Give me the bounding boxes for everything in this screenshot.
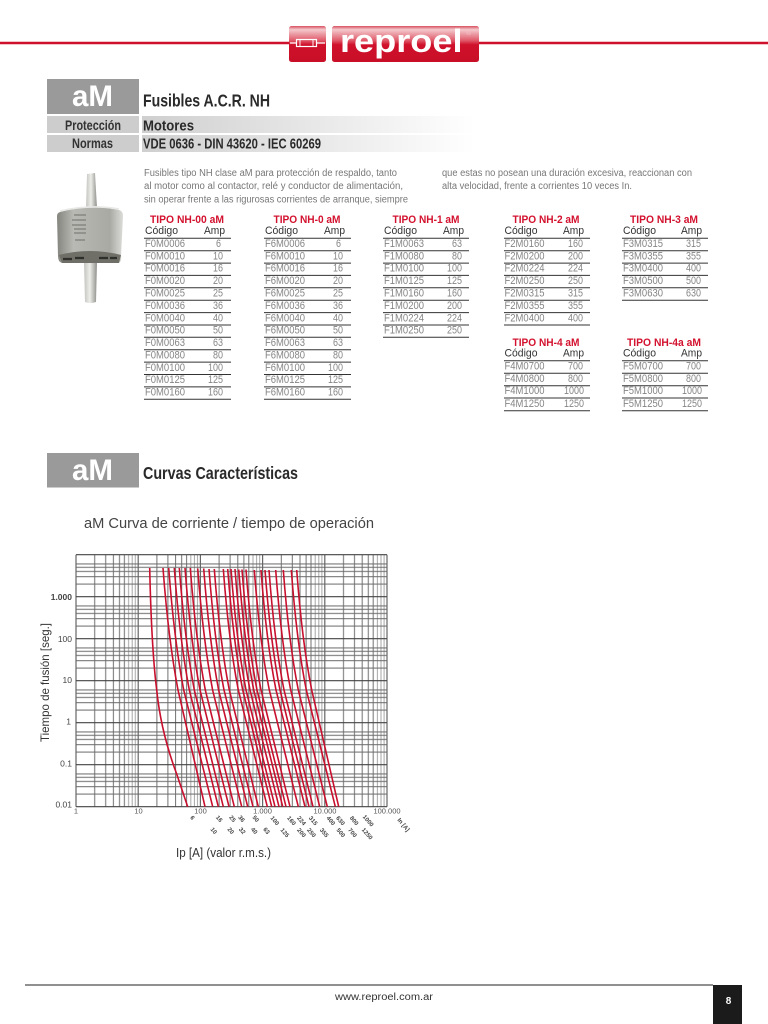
description text [144, 168, 692, 206]
heading: Curvas Características: Curvas Características [143, 463, 298, 483]
table: TIPO NH-0 aM: F6M0063 [265, 337, 305, 349]
section badge: aM: aM [72, 80, 113, 113]
table: TIPO NH-4a aM [622, 337, 708, 411]
y axis labels: 1 [66, 716, 71, 726]
rated current labels: 250 [305, 828, 317, 840]
table: TIPO NH-1 aM: F1M0200 [384, 300, 424, 312]
header red rule [0, 42, 768, 44]
table: TIPO NH-0 aM: 16 [333, 263, 343, 275]
table: TIPO NH-0 aM: F6M0010 [265, 250, 305, 262]
table: TIPO NH-2 aM [504, 214, 590, 325]
table: TIPO NH-00 aM: 63 [213, 337, 223, 349]
table: TIPO NH-00 aM: F0M0050 [145, 325, 185, 337]
table: TIPO NH-4 aM: 1000 [564, 385, 584, 397]
table: TIPO NH-00 aM: 160 [208, 386, 223, 398]
table: TIPO NH-00 aM: 40 [213, 312, 223, 324]
table: TIPO NH-0 aM: F6M0080 [265, 349, 305, 361]
description text: al motor como al contactor, relé y conductor de alimentación, [144, 181, 403, 192]
table: TIPO NH-1 aM: F1M0080 [384, 250, 424, 262]
table: TIPO NH-4 aM [504, 337, 590, 411]
table: TIPO NH-0 aM: 160 [328, 386, 343, 398]
rated current labels: 224 [295, 816, 307, 828]
rated current labels [188, 814, 410, 842]
table: TIPO NH-2 aM: F2M0400 [504, 312, 544, 324]
table: TIPO NH-3 aM: Código [623, 225, 656, 237]
y axis labels: 100 [58, 634, 72, 644]
table: TIPO NH-00 aM: F0M0010 [145, 250, 185, 262]
logo: reproel: ® [466, 29, 472, 37]
table: TIPO NH-3 aM: 500 [686, 275, 701, 287]
description text: sin operar frente a las rigurosas corrientes de arranque, siempre [144, 194, 408, 206]
table: TIPO NH-0 aM: 25 [333, 288, 343, 300]
table: TIPO NH-0 aM: F6M0160 [265, 386, 305, 398]
table: TIPO NH-1 aM: F1M0125 [384, 275, 424, 287]
rated current labels: In [A] [396, 818, 410, 833]
table: TIPO NH-1 aM: 250 [447, 325, 462, 337]
table: TIPO NH-2 aM: 200 [568, 250, 583, 262]
icon: fuse [289, 26, 326, 62]
table: TIPO NH-00 aM: 100 [208, 362, 223, 374]
fuse curves [150, 568, 339, 807]
table: TIPO NH-00 aM: 6 [216, 238, 221, 250]
table: TIPO NH-2 aM: 250 [568, 275, 583, 287]
table: TIPO NH-4a aM: 700 [686, 360, 701, 372]
table: TIPO NH-2 aM: F2M0250 [504, 275, 544, 287]
x axis labels: 100 [194, 806, 207, 816]
row: Normas: Normas [72, 135, 113, 151]
table: TIPO NH-3 aM: F3M0315 [623, 238, 663, 250]
y axis labels: 10 [63, 675, 72, 685]
table: TIPO NH-0 aM: 100 [328, 362, 343, 374]
rated current labels: 400 [325, 816, 336, 828]
table: TIPO NH-0 aM: 125 [328, 374, 343, 386]
table: TIPO NH-3 aM: F3M0355 [623, 250, 663, 262]
x axis labels: 10.000 [314, 806, 336, 816]
table: TIPO NH-1 aM: F1M0100 [384, 263, 424, 275]
table: TIPO NH-0 aM: F6M0006 [265, 238, 305, 250]
table: TIPO NH-0 aM: 6 [336, 238, 341, 250]
rated current labels: 630 [334, 816, 346, 828]
table: TIPO NH-00 aM [144, 214, 231, 399]
rated current labels: 800 [348, 816, 359, 828]
rated current labels: 125 [279, 828, 290, 840]
table: TIPO NH-00 aM: F0M0160 [145, 386, 185, 398]
rated current labels: 40 [249, 827, 258, 836]
table: TIPO NH-0 aM: 80 [333, 349, 343, 361]
table: TIPO NH-0 aM: Amp [324, 225, 345, 237]
table: TIPO NH-3 aM: F3M0500 [623, 275, 663, 287]
table: TIPO NH-3 aM: F3M0400 [623, 263, 663, 275]
table: TIPO NH-2 aM: Amp [563, 225, 584, 237]
logo: reproel: reproel [340, 23, 462, 59]
table: TIPO NH-0 aM: F6M0016 [265, 263, 305, 275]
table: TIPO NH-00 aM: F0M0020 [145, 275, 185, 287]
section badge: aM [47, 79, 139, 114]
website url: www.reproel.com.ar [334, 992, 434, 1003]
footer [25, 985, 742, 1024]
rated current labels: 25 [227, 815, 237, 824]
table: TIPO NH-4 aM: F4M0700 [504, 360, 544, 372]
table: TIPO NH-2 aM: 224 [568, 263, 583, 275]
rated current labels: 20 [226, 827, 235, 836]
table: TIPO NH-00 aM: TIPO NH-00 aM [150, 214, 224, 226]
table: TIPO NH-1 aM: TIPO NH-1 aM [392, 214, 460, 226]
rated current labels: 1000 [361, 814, 374, 829]
description text: Fusibles tipo NH clase aM para protección de respaldo, tanto [144, 168, 397, 179]
table: TIPO NH-3 aM: 315 [686, 238, 701, 250]
row: Protección: Protección [65, 117, 121, 133]
rated current labels: 32 [237, 827, 246, 836]
table: TIPO NH-4a aM: F5M1250 [623, 398, 663, 410]
table: TIPO NH-0 aM: 20 [333, 275, 343, 287]
row: Normas: VDE 0636 - DIN 43620 - IEC 60269 [143, 136, 321, 152]
table: TIPO NH-4 aM: TIPO NH-4 aM [512, 337, 580, 349]
table: TIPO NH-1 aM: 224 [447, 312, 462, 324]
table: TIPO NH-1 aM: 200 [447, 300, 462, 312]
table: TIPO NH-1 aM: F1M0160 [384, 288, 424, 300]
table: TIPO NH-4 aM: Amp [563, 348, 584, 360]
table: TIPO NH-0 aM: F6M0025 [265, 288, 305, 300]
chart: current / operating time curves [38, 555, 410, 860]
table: TIPO NH-3 aM: 355 [686, 250, 701, 262]
table: TIPO NH-1 aM: 125 [447, 275, 462, 287]
table: TIPO NH-2 aM: 160 [568, 238, 583, 250]
y axis labels: 1.000 [51, 592, 72, 602]
table: TIPO NH-0 aM: F6M0020 [265, 275, 305, 287]
table: TIPO NH-4a aM: TIPO NH-4a aM [627, 337, 701, 349]
table: TIPO NH-0 aM: 63 [333, 337, 343, 349]
rated current labels: 63 [261, 827, 271, 836]
table: TIPO NH-1 aM: 100 [447, 263, 462, 275]
rated current labels: 315 [307, 816, 318, 828]
table: TIPO NH-3 aM [622, 214, 708, 300]
table: TIPO NH-4 aM: F4M0800 [504, 373, 544, 385]
x axis labels: 1 [74, 806, 78, 816]
y axis labels: 0.01 [55, 800, 72, 810]
table: TIPO NH-3 aM: 630 [686, 288, 701, 300]
rated current labels: 100 [269, 816, 280, 828]
table: TIPO NH-0 aM: F6M0050 [265, 325, 305, 337]
table: TIPO NH-2 aM: 400 [568, 312, 583, 324]
rated current labels: 6 [188, 815, 196, 822]
table: TIPO NH-0 aM: 50 [333, 325, 343, 337]
table: TIPO NH-3 aM: 400 [686, 263, 701, 275]
table: TIPO NH-4 aM: 800 [568, 373, 583, 385]
table: TIPO NH-4a aM: Código [623, 348, 656, 360]
table: TIPO NH-0 aM: F6M0036 [265, 300, 305, 312]
table: TIPO NH-00 aM: 125 [208, 374, 223, 386]
table: TIPO NH-0 aM: Código [265, 225, 298, 237]
table: TIPO NH-0 aM: TIPO NH-0 aM [274, 214, 340, 226]
heading: Fusibles A.C.R. NH: Fusibles A.C.R. NH [143, 90, 270, 110]
table: TIPO NH-2 aM: TIPO NH-2 aM [512, 214, 580, 226]
table: TIPO NH-2 aM: Código [504, 225, 538, 237]
table: TIPO NH-4 aM: 1250 [564, 398, 584, 410]
table: TIPO NH-00 aM: F0M0100 [145, 362, 185, 374]
table: TIPO NH-1 aM: 160 [447, 288, 462, 300]
table: TIPO NH-4a aM: F5M0700 [623, 360, 663, 372]
row: Normas [47, 135, 475, 152]
table: TIPO NH-2 aM: F2M0224 [504, 263, 544, 275]
table: TIPO NH-1 aM [383, 214, 469, 337]
y axis title: Tiempo de fusión [seg.] [38, 623, 52, 742]
table: TIPO NH-00 aM: F0M0016 [145, 263, 185, 275]
rated current labels: 160 [285, 816, 297, 828]
rated current labels: 500 [335, 828, 346, 840]
table: TIPO NH-00 aM: 16 [213, 263, 223, 275]
table: TIPO NH-00 aM: F0M0036 [145, 300, 185, 312]
table: TIPO NH-4a aM: Amp [681, 348, 702, 360]
logo: reproel [289, 23, 479, 62]
table: TIPO NH-2 aM: 355 [568, 300, 583, 312]
table: TIPO NH-4 aM: Código [504, 348, 538, 360]
rated current labels: 16 [214, 815, 223, 824]
table: TIPO NH-2 aM: 315 [568, 288, 583, 300]
table: TIPO NH-00 aM: 50 [213, 325, 223, 337]
table: TIPO NH-00 aM: 20 [213, 275, 223, 287]
table: TIPO NH-00 aM: F0M0063 [145, 337, 185, 349]
section badge: aM curves: aM [72, 454, 113, 487]
table: TIPO NH-0 aM: F6M0100 [265, 362, 305, 374]
x axis labels: 100.000 [373, 806, 401, 816]
rated current labels: 200 [295, 828, 307, 840]
table: TIPO NH-1 aM: F1M0224 [384, 312, 424, 324]
table: TIPO NH-4a aM: 1000 [682, 385, 702, 397]
rated current labels: 355 [318, 828, 329, 840]
table: TIPO NH-2 aM: F2M0200 [504, 250, 544, 262]
chart title: aM Curva de corriente / tiempo de operación [84, 516, 374, 532]
table: TIPO NH-4a aM: F5M1000 [623, 385, 663, 397]
x axis labels: 1.000 [253, 806, 272, 816]
table: TIPO NH-00 aM: 25 [213, 288, 223, 300]
rated current labels: 50 [251, 815, 260, 824]
x axis title: Ip [A] (valor r.m.s.) [176, 846, 271, 860]
table: TIPO NH-2 aM: F2M0315 [504, 288, 544, 300]
table: TIPO NH-0 aM: 40 [333, 312, 343, 324]
table: TIPO NH-0 aM: 10 [333, 250, 343, 262]
table: TIPO NH-00 aM: F0M0006 [145, 238, 185, 250]
table: TIPO NH-1 aM: F1M0250 [384, 325, 424, 337]
table: TIPO NH-1 aM: Código [384, 225, 417, 237]
chart grid [76, 555, 387, 807]
table: TIPO NH-3 aM: F3M0630 [623, 288, 663, 300]
table: TIPO NH-0 aM: 36 [333, 300, 343, 312]
table: TIPO NH-00 aM: F0M0025 [145, 288, 185, 300]
table: TIPO NH-00 aM: Amp [204, 225, 225, 237]
table: TIPO NH-00 aM: 36 [213, 300, 223, 312]
y axis labels: 0.1 [60, 758, 72, 768]
page number: 8 [726, 996, 732, 1007]
table: TIPO NH-4a aM: 1250 [682, 398, 702, 410]
table: TIPO NH-00 aM: F0M0080 [145, 349, 185, 361]
table: TIPO NH-00 aM: 10 [213, 250, 223, 262]
table: TIPO NH-1 aM: 63 [452, 238, 462, 250]
section badge: aM curves [47, 453, 139, 488]
table: TIPO NH-0 aM: F6M0125 [265, 374, 305, 386]
table: TIPO NH-1 aM: Amp [443, 225, 464, 237]
icon: NH fuse photo [57, 173, 123, 303]
description text: alta velocidad, frente a corrientes 10 veces In. [442, 181, 632, 192]
table: TIPO NH-4a aM: F5M0800 [623, 373, 663, 385]
description text: que estas no posean una duración excesiva, reaccionan con [442, 168, 692, 179]
rated current labels: 1250 [360, 827, 373, 842]
rated current labels: 700 [346, 828, 358, 840]
table: TIPO NH-00 aM: 80 [213, 349, 223, 361]
table: TIPO NH-4a aM: 800 [686, 373, 701, 385]
rated current labels: 36 [236, 815, 246, 824]
page number [713, 985, 742, 1024]
row: Protección [47, 116, 475, 134]
x axis labels [74, 806, 401, 816]
table: TIPO NH-4 aM: F4M1250 [504, 398, 544, 410]
table: TIPO NH-00 aM: F0M0125 [145, 374, 185, 386]
table: TIPO NH-4 aM: F4M1000 [504, 385, 544, 397]
table: TIPO NH-1 aM: F1M0063 [384, 238, 424, 250]
rated current labels: 10 [209, 827, 218, 836]
table: TIPO NH-00 aM: F0M0040 [145, 312, 185, 324]
table: TIPO NH-00 aM: Código [145, 225, 178, 237]
table: TIPO NH-3 aM: TIPO NH-3 aM [630, 214, 698, 226]
table: TIPO NH-1 aM: 80 [452, 250, 462, 262]
table: TIPO NH-3 aM: Amp [681, 225, 702, 237]
table: TIPO NH-0 aM [264, 214, 351, 399]
table: TIPO NH-4 aM: 700 [568, 360, 583, 372]
y axis labels [51, 592, 72, 810]
table: TIPO NH-0 aM: F6M0040 [265, 312, 305, 324]
table: TIPO NH-2 aM: F2M0355 [504, 300, 544, 312]
table: TIPO NH-2 aM: F2M0160 [504, 238, 544, 250]
row: Protección: Motores [143, 118, 194, 134]
x axis labels: 10 [134, 806, 143, 816]
